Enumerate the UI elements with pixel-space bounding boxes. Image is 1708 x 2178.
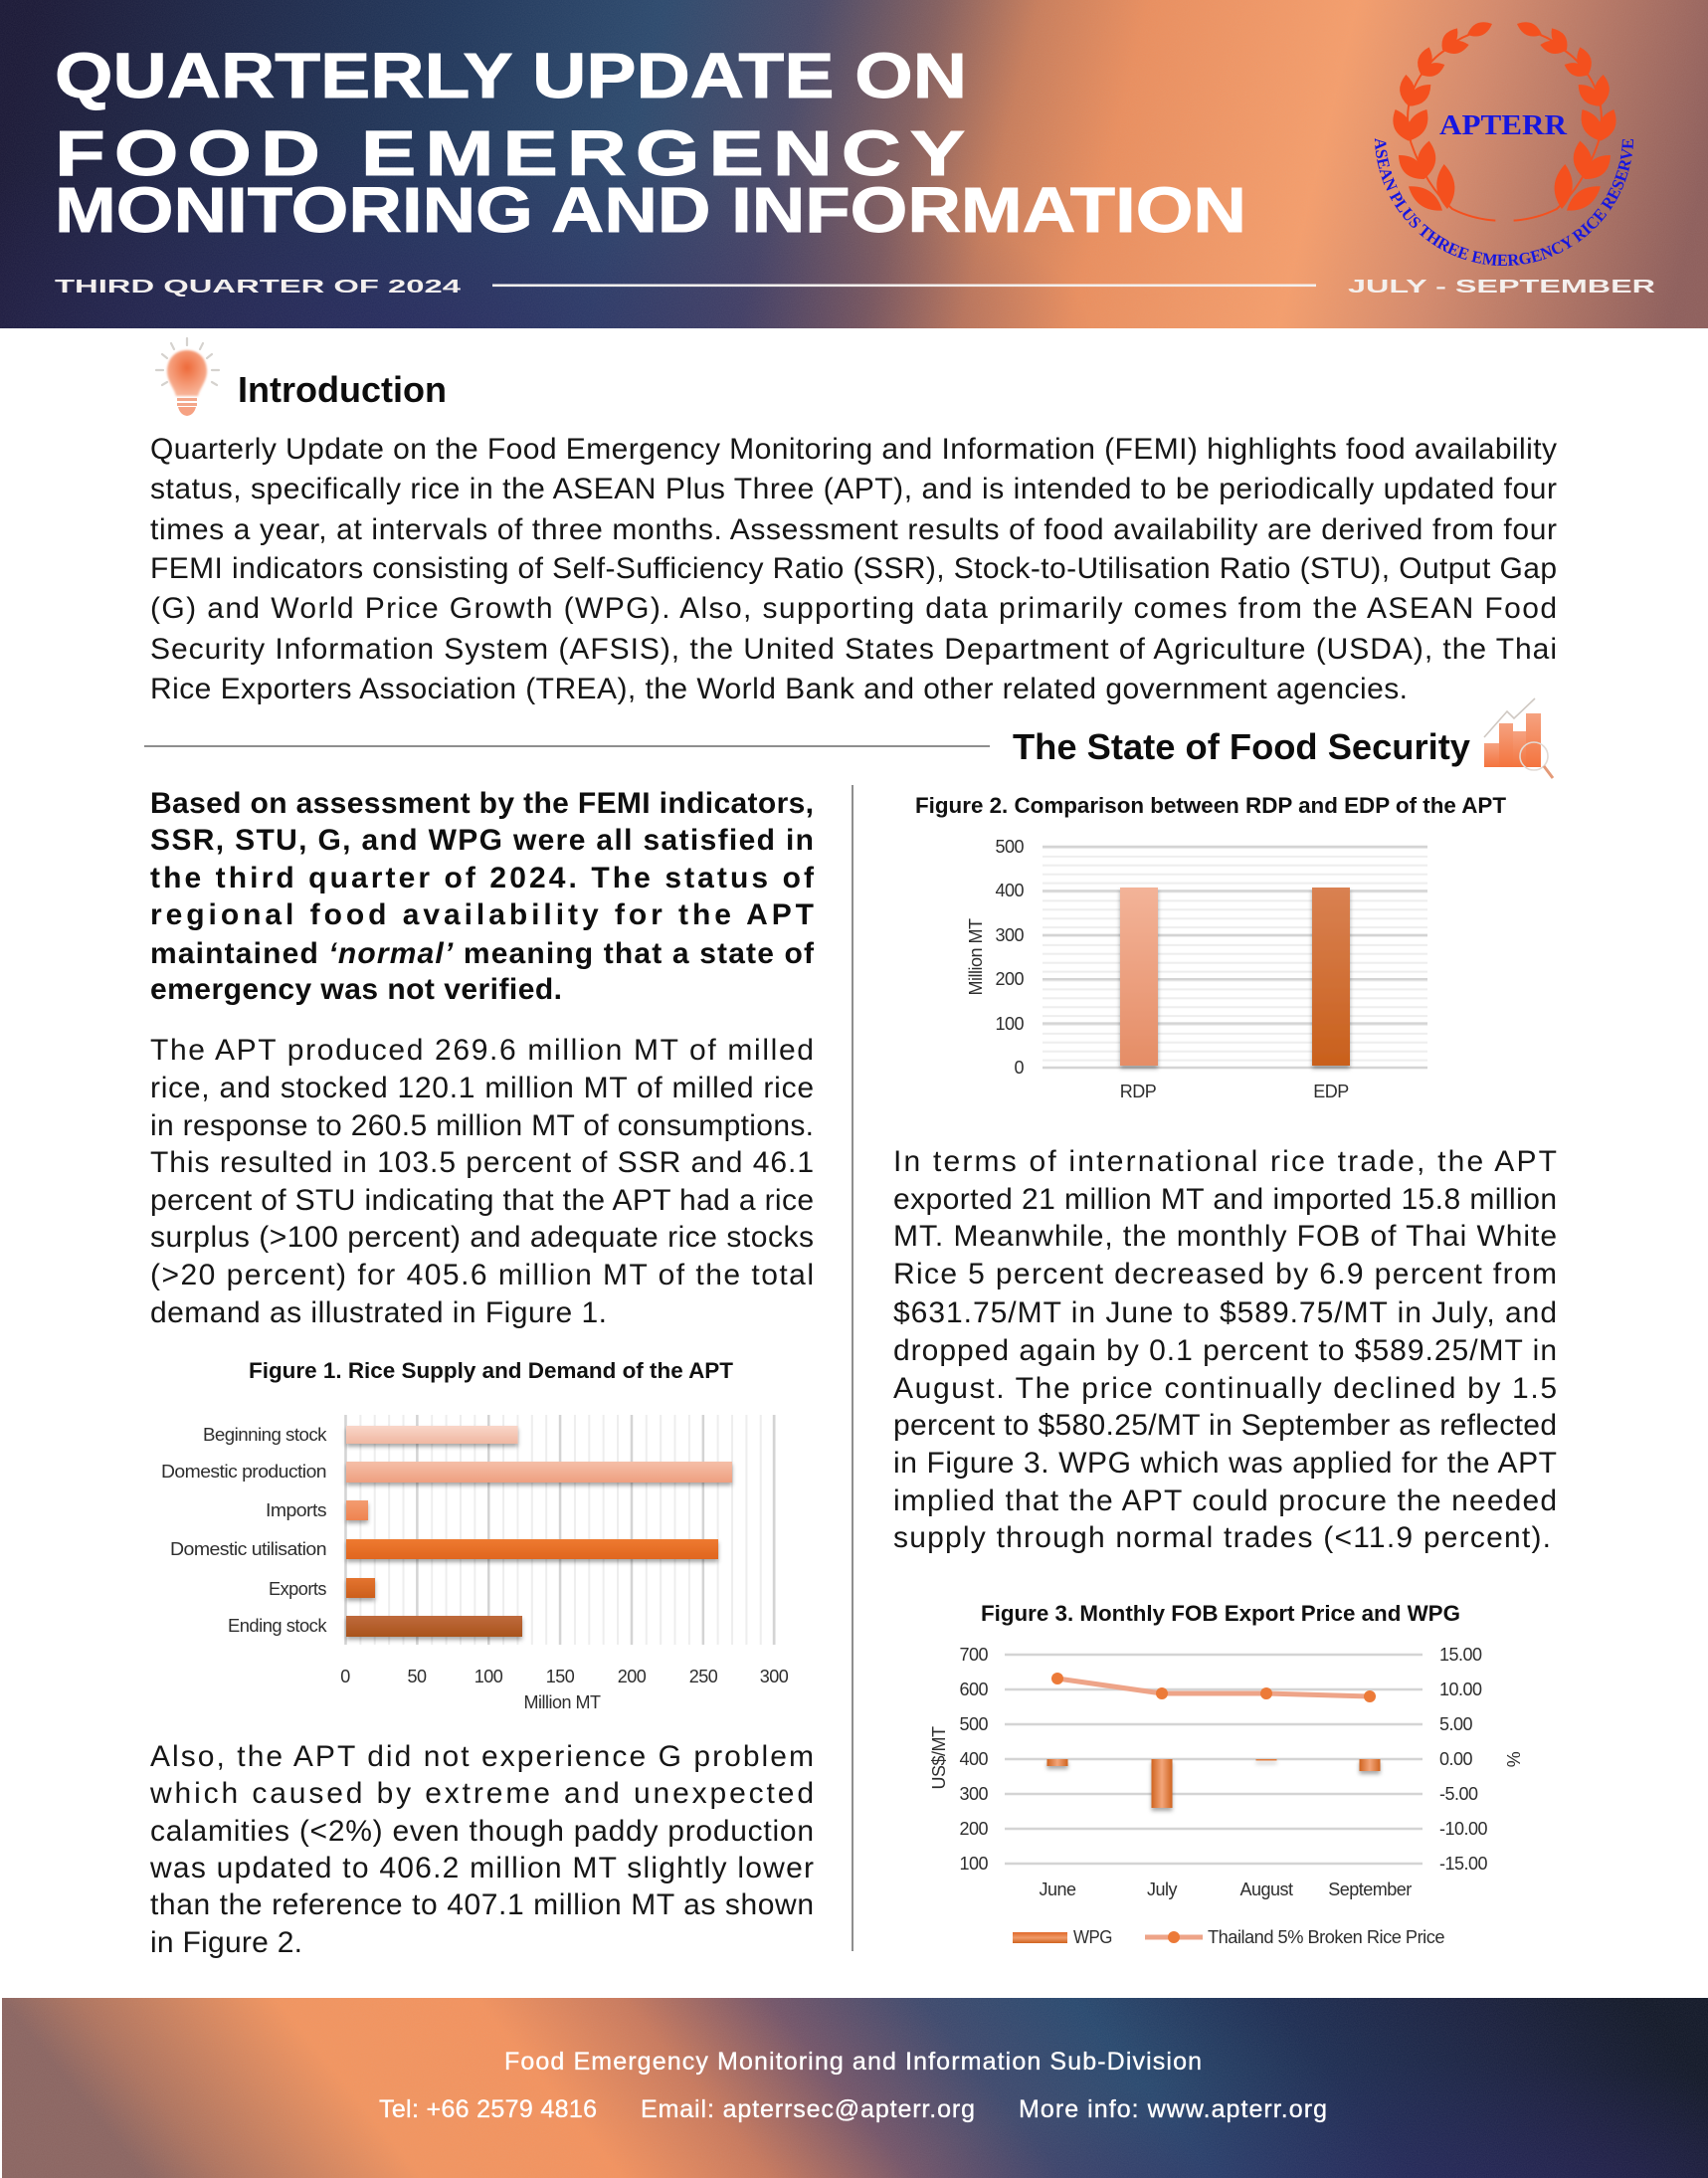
figure 3 left axis: 200 — [959, 1819, 988, 1839]
figure 2 y axis — [995, 837, 1024, 1078]
icon: light bulb — [156, 338, 219, 416]
right column: rice trade paragraph: implied that the APT could procure the needed — [893, 1485, 1557, 1517]
logo: APTERR wreath: APTERR — [1439, 109, 1568, 141]
footer banner — [2, 1998, 1708, 2178]
figure 3 price line — [1051, 1673, 1376, 1702]
subtitle: quarter: THIRD QUARTER OF 2024 — [55, 277, 461, 297]
figure 2 y axis: 100 — [995, 1014, 1024, 1034]
left column: production paragraph — [150, 1034, 814, 1329]
left column: assessment summary (bold): SSR, STU, G, and WPG were all satisfied in — [150, 824, 814, 857]
intro paragraph: status, specifically rice in the ASEAN Plus Three (APT), and is intended to be periodically updated four — [150, 473, 1557, 505]
figure 3 WPG bars — [1046, 1759, 1381, 1808]
title line 1: QUARTERLY UPDATE ON — [55, 40, 967, 111]
left column: assessment summary (bold): Based on assessment by the FEMI indicators, — [150, 787, 814, 820]
figure 2 y axis: 400 — [995, 881, 1024, 900]
figure 2: RDP and EDP column chart — [915, 793, 1507, 1101]
footer: division name: Food Emergency Monitoring and Information Sub-Division — [504, 2048, 1202, 2076]
figure 2 title: Figure 2. Comparison between RDP and EDP of the APT — [915, 793, 1507, 818]
logo: APTERR wreath: ASEAN PLUS THREE EMERGENCY RICE RESERVE — [1375, 138, 1633, 267]
title line 3: MONITORING AND INFORMATION — [55, 174, 1246, 246]
intro paragraph: times a year, at intervals of three months. Assessment results of food availability are derived from four — [150, 513, 1557, 546]
heading: state of food security: The State of Food Security — [1013, 726, 1470, 767]
figure 3 right axis: -10.00 — [1439, 1819, 1488, 1839]
figure 3 right axis: 10.00 — [1439, 1680, 1482, 1699]
right column: rice trade paragraph: percent to $580.25/MT in September as reflected — [893, 1409, 1557, 1442]
left column: production paragraph: percent of STU indicating that the APT had a rice — [150, 1184, 814, 1217]
heading: introduction: Introduction — [238, 369, 447, 410]
figure 3 legend: WPG — [1073, 1927, 1112, 1947]
footer: telephone: Tel: +66 2579 4816 — [379, 2095, 597, 2123]
figure 3 month labels — [1039, 1880, 1412, 1899]
left column: assessment summary (bold): the third quarter of 2024. The status of — [150, 862, 815, 894]
left column: output gap paragraph: in Figure 2. — [150, 1926, 302, 1959]
header banner — [0, 0, 1708, 328]
right column: rice trade paragraph: In terms of international rice trade, the APT — [893, 1145, 1557, 1178]
right column: rice trade paragraph: supply through normal trades (<11.9 percent). — [893, 1521, 1551, 1554]
figure 3 left axis: 100 — [959, 1854, 988, 1874]
right column: rice trade paragraph — [893, 1145, 1557, 1554]
figure 3 month labels: August — [1239, 1880, 1293, 1899]
figure 3 left axis — [959, 1645, 988, 1874]
figure 1 x axis: 50 — [407, 1667, 427, 1686]
figure 3 month labels: September — [1328, 1880, 1412, 1899]
figure 3 right axis: 5.00 — [1439, 1714, 1473, 1734]
figure 1 category labels: Domestic production — [161, 1462, 326, 1482]
figure 1 title: Figure 1. Rice Supply and Demand of the APT — [249, 1358, 734, 1383]
figure 1 x axis: Million MT — [523, 1692, 601, 1712]
figure 1 x axis: 250 — [689, 1667, 718, 1686]
left column: assessment summary (bold): maintained ‘normal’ meaning that a state of — [150, 937, 815, 970]
subtitle rule — [492, 285, 1316, 287]
left column: output gap paragraph: which caused by extreme and unexpected — [149, 1777, 814, 1810]
left column: assessment summary (bold): emergency was not verified. — [150, 973, 562, 1006]
figure 3 right axis: -15.00 — [1439, 1854, 1488, 1874]
intro paragraph: Quarterly Update on the Food Emergency Monitoring and Information (FEMI) highlights food availability — [150, 433, 1557, 466]
figure 2 y axis: 500 — [995, 837, 1024, 857]
left column: output gap paragraph: than the reference to 407.1 million MT as shown — [150, 1888, 814, 1921]
left column: assessment summary (bold): regional food availability for the APT — [150, 898, 814, 931]
figure 2 category labels: RDP — [1120, 1082, 1157, 1101]
figure 3 legend — [1013, 1927, 1444, 1947]
figure 1 category labels — [161, 1425, 328, 1636]
figure 3 month labels: June — [1039, 1880, 1076, 1899]
figure 1: rice supply and demand bar chart — [161, 1358, 789, 1712]
figure 3 right axis: 0.00 — [1439, 1749, 1473, 1769]
left column: production paragraph: in response to 260.5 million MT of consumptions. — [150, 1109, 814, 1142]
figure 3 right axis: -5.00 — [1439, 1784, 1478, 1804]
figure 1 category labels: Imports — [266, 1500, 327, 1520]
footer background — [2, 1998, 1708, 2178]
left column: production paragraph: demand as illustrated in Figure 1. — [150, 1296, 607, 1329]
intro paragraph: Rice Exporters Association (TREA), the World Bank and other related government agencies. — [150, 673, 1408, 705]
right column: rice trade paragraph: dropped again by 0.1 percent to $589.25/MT in — [893, 1334, 1557, 1367]
figure 3 left axis: 700 — [959, 1645, 988, 1665]
footer: email: Email: apterrsec@apterr.org — [641, 2095, 975, 2123]
left column: production paragraph: rice, and stocked 120.1 million MT of milled rice — [150, 1072, 814, 1104]
left column: production paragraph: (>20 percent) for 405.6 million MT of the total — [150, 1259, 814, 1291]
right column: rice trade paragraph: August. The price continually declined by 1.5 — [893, 1372, 1557, 1405]
figure 1 category labels: Domestic utilisation — [170, 1539, 326, 1559]
figure 1 x axis: 300 — [760, 1667, 789, 1686]
icon: bar chart with magnifier — [1484, 698, 1553, 778]
intro paragraph — [150, 433, 1557, 705]
right column: rice trade paragraph: MT. Meanwhile, the monthly FOB of Thai White — [893, 1220, 1557, 1253]
left column: output gap paragraph: Also, the APT did not experience G problem — [150, 1740, 814, 1773]
left column: production paragraph: The APT produced 269.6 million MT of milled — [150, 1034, 814, 1067]
figure 2 y axis title: Million MT — [966, 918, 986, 996]
figure 2 y axis: 200 — [995, 969, 1024, 989]
figure 1 x axis: 150 — [546, 1667, 575, 1686]
header background — [0, 0, 1708, 328]
figure 3 left axis title: US$/MT — [929, 1726, 949, 1790]
figure 1 bars — [346, 1426, 732, 1637]
left column: assessment summary (bold) — [150, 787, 815, 1006]
figure 3 right axis title: % — [1503, 1751, 1523, 1767]
figure 2 category labels: EDP — [1313, 1082, 1349, 1101]
figure 1 category labels: Exports — [269, 1579, 326, 1599]
figure 3 legend: Thailand 5% Broken Rice Price — [1208, 1927, 1444, 1947]
intro paragraph: (G) and World Price Growth (WPG). Also, supporting data primarily comes from the ASEAN Food — [150, 592, 1557, 625]
figure 3 title: Figure 3. Monthly FOB Export Price and WPG — [981, 1601, 1460, 1626]
figure 1 x axis — [340, 1667, 789, 1712]
intro paragraph: FEMI indicators consisting of Self-Sufficiency Ratio (SSR), Stock-to-Utilisation Ratio (STU), Output Gap — [150, 552, 1557, 585]
right column: rice trade paragraph: $631.75/MT in June to $589.75/MT in July, and — [893, 1296, 1557, 1329]
footer: website: More info: www.apterr.org — [1019, 2095, 1327, 2123]
figure 1 x axis: 200 — [618, 1667, 647, 1686]
figure 2 y axis: 300 — [995, 925, 1024, 945]
right column: rice trade paragraph: Rice 5 percent decreased by 6.9 percent from — [893, 1258, 1557, 1290]
figure 3 left axis: 600 — [959, 1680, 988, 1699]
figure 3 month labels: July — [1147, 1880, 1178, 1899]
title line 2: FOOD EMERGENCY — [55, 117, 965, 189]
figure 3 left axis: 300 — [959, 1784, 988, 1804]
figure 2 bars — [1120, 888, 1350, 1066]
figure 1 category labels: Ending stock — [228, 1616, 328, 1636]
figure 3: monthly FOB price and WPG chart — [929, 1601, 1523, 1947]
figure 1 x axis: 0 — [340, 1667, 350, 1686]
left column: output gap paragraph: calamities (<2%) even though paddy production — [150, 1815, 814, 1848]
figure 3 left axis: 500 — [959, 1714, 988, 1734]
right column: rice trade paragraph: exported 21 million MT and imported 15.8 million — [893, 1183, 1557, 1216]
figure 2 category labels — [1120, 1082, 1349, 1101]
right column: rice trade paragraph: in Figure 3. WPG which was applied for the APT — [893, 1447, 1557, 1480]
figure 2 y axis: 0 — [1014, 1058, 1024, 1078]
subtitle: months: JULY - SEPTEMBER — [1348, 277, 1655, 297]
left column: production paragraph: surplus (>100 percent) and adequate rice stocks — [150, 1221, 814, 1254]
logo: APTERR wreath — [1375, 22, 1633, 267]
intro paragraph: Security Information System (AFSIS), the United States Department of Agriculture (USDA), the Thai — [150, 633, 1557, 666]
figure 1 x axis: 100 — [474, 1667, 503, 1686]
figure 3 right axis — [1439, 1645, 1488, 1874]
left column: output gap paragraph — [149, 1740, 814, 1959]
figure 3 left axis: 400 — [959, 1749, 988, 1769]
figure 3 right axis: 15.00 — [1439, 1645, 1482, 1665]
figure 1 category labels: Beginning stock — [203, 1425, 328, 1445]
left column: output gap paragraph: was updated to 406.2 million MT slightly lower — [149, 1852, 814, 1884]
left column: production paragraph: This resulted in 103.5 percent of SSR and 46.1 — [150, 1146, 814, 1179]
